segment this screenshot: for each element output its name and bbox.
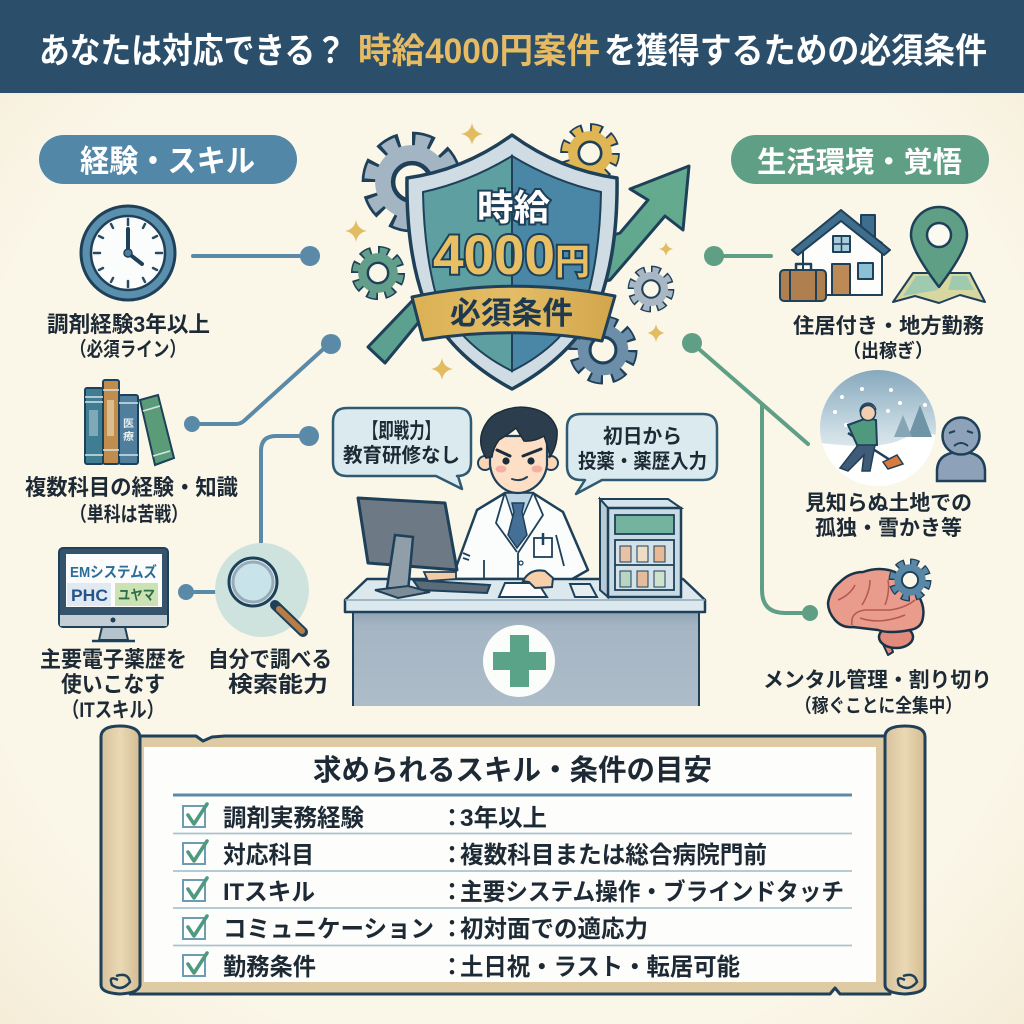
label: house: （出稼ぎ）	[843, 339, 933, 362]
label: clock	[47, 312, 210, 361]
connector: magnifier to center	[261, 426, 319, 545]
shield text: 4000 yen: 円	[555, 241, 590, 282]
row: departments: 複数科目または総合病院門前	[460, 842, 767, 869]
row: experience	[183, 804, 547, 832]
row: working conditions: 土日祝・ラスト・転居可能	[460, 954, 740, 981]
white sheet	[144, 747, 876, 982]
icon: monitor with system logos	[59, 548, 168, 641]
pharmacist figure	[455, 407, 588, 586]
label: magnifier	[208, 647, 332, 697]
connector: house	[704, 246, 771, 266]
gear: gold	[567, 130, 613, 176]
row: IT skills: ITスキル	[223, 879, 315, 906]
ribbon text: 必須条件	[450, 296, 573, 331]
right roll	[885, 726, 925, 994]
gear: light grey	[633, 271, 669, 307]
label: monitor	[40, 647, 187, 722]
speech bubble: left: 【即戦力】	[363, 420, 440, 443]
label: brain: （稼ぐことに全集中）	[795, 695, 962, 717]
icon: monitor with system logos: ユヤマ	[118, 587, 155, 603]
label: house	[793, 315, 984, 362]
left roll	[101, 726, 140, 994]
row: communication: 初対面での適応力	[460, 916, 648, 943]
icon: map pin and map	[893, 207, 985, 303]
icon: lonely figure	[937, 418, 985, 481]
speech bubble: right: 初日から	[603, 425, 682, 448]
left category pill	[39, 135, 297, 184]
shield text: 4000 yen: 4000	[433, 223, 555, 286]
speech bubble: right	[567, 414, 717, 494]
shield	[407, 135, 617, 389]
medicine machine	[600, 499, 681, 597]
parchment scroll panel	[101, 726, 925, 994]
label: books: 複数科目の経験・知識	[25, 475, 238, 500]
label: clock: （必須ライン）	[70, 338, 186, 361]
row: working conditions	[183, 953, 740, 981]
icon: monitor with system logos: PHC	[71, 586, 108, 605]
connector: snow scene	[682, 333, 808, 444]
speech bubble: left: 教育研修なし	[343, 444, 460, 467]
row: working conditions: 勤務条件	[223, 954, 316, 981]
label: brain	[763, 669, 992, 717]
panel heading: 求められるスキル・条件の目安	[313, 754, 712, 787]
title banner: を獲得するための必須条件	[604, 32, 987, 71]
row: IT skills: 主要システム操作・ブラインドタッチ	[460, 878, 844, 906]
row: IT skills: ：	[440, 879, 464, 906]
icon: monitor with system logos: EMシステムズ	[70, 563, 157, 581]
title banner: あなたは対応できる？	[39, 32, 346, 71]
white coat	[455, 493, 588, 586]
sparkles	[345, 123, 673, 380]
gear: dark blue grey	[576, 323, 630, 377]
row: IT skills	[183, 878, 844, 906]
title banner: 時給4000円案件	[358, 32, 600, 71]
computer monitor and keyboard	[358, 498, 490, 598]
title banner	[0, 0, 1024, 95]
label: brain: メンタル管理・割り切り	[763, 669, 992, 692]
label: monitor: 主要電子薬歴を	[40, 647, 187, 672]
row: communication: コミュニケーション	[223, 916, 434, 943]
connector: brain	[762, 405, 818, 621]
arrow: rising	[368, 166, 689, 363]
icon: books: 医	[123, 418, 134, 430]
face details	[496, 449, 542, 480]
icon: house and suitcase	[780, 210, 890, 301]
scroll paper	[130, 736, 890, 994]
label: books: （単科は苦戦）	[70, 503, 188, 526]
icon: books: 療	[123, 430, 134, 443]
icon: magnifying glass	[215, 543, 309, 637]
label: magnifier: 検索能力	[228, 672, 328, 697]
gear: green	[357, 252, 399, 294]
label: snow scene	[805, 492, 972, 540]
right category pill: 生活環境・覚悟	[757, 146, 962, 179]
pharmacy counter	[345, 579, 705, 706]
row: working conditions: ：	[440, 954, 464, 981]
speech bubble: right: 投薬・薬歴入力	[578, 450, 707, 473]
ribbon	[412, 286, 615, 341]
label: house: 住居付き・地方勤務	[793, 315, 984, 338]
icon: brain with gear	[828, 563, 927, 655]
row: communication: ：	[440, 916, 464, 943]
icon: clock	[81, 206, 175, 300]
row: departments: ：	[440, 842, 464, 869]
ears and face	[478, 456, 492, 470]
gear: large grey	[372, 142, 452, 222]
speech bubble: left	[333, 408, 471, 489]
tie	[508, 503, 527, 548]
connector: monitor to magnifier	[178, 584, 216, 600]
connector: books to shield	[184, 334, 341, 432]
shield text: hourly: 時給	[477, 187, 550, 228]
row: experience: ：	[440, 805, 464, 832]
row: experience: 3年以上	[460, 805, 547, 832]
row: departments	[183, 841, 767, 869]
label: monitor: （ITスキル）	[62, 699, 164, 722]
row: experience: 調剤実務経験	[223, 805, 364, 832]
left category pill: 経験・スキル	[80, 144, 255, 179]
icon: shoveling snow scene	[820, 370, 940, 490]
label: monitor: 使いこなす	[61, 672, 165, 697]
hair	[481, 407, 557, 458]
label: clock: 調剤経験3年以上	[47, 312, 210, 337]
row: departments: 対応科目	[223, 842, 314, 869]
icon: books	[85, 380, 174, 465]
paper, hand and calculator on desk	[499, 570, 597, 597]
row: communication	[183, 916, 648, 943]
label: snow scene: 見知らぬ土地での	[805, 492, 972, 515]
connector: clock to shield	[193, 246, 320, 266]
right category pill	[731, 135, 989, 184]
label: magnifier: 自分で調べる	[208, 647, 332, 672]
central emblem: shield, gears, arrow	[345, 123, 689, 389]
label: snow scene: 孤独・雪かき等	[815, 517, 962, 540]
label: books	[25, 475, 238, 526]
